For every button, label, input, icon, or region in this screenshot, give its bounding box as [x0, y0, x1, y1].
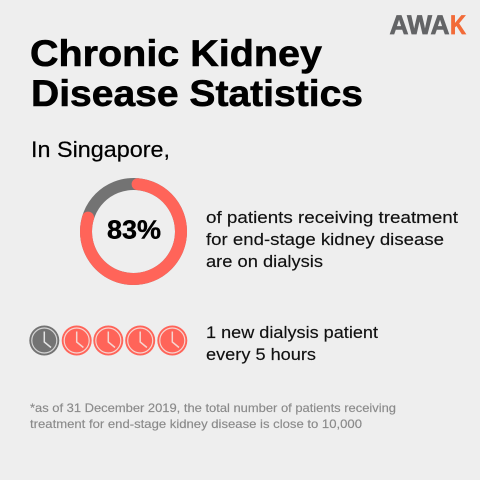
- donut value: 83%: [107, 216, 161, 244]
- icon: grey clock: [29, 326, 59, 356]
- text: dialysis share: for end-stage kidney disease: [206, 231, 444, 249]
- subheading: In Singapore: In Singapore,: [31, 137, 170, 162]
- text: dialysis share: of patients receiving treatment: [206, 209, 458, 227]
- donut chart: 83%: [86, 184, 181, 279]
- icon: red clock 1: [62, 326, 92, 356]
- footnote: [30, 401, 396, 431]
- icon: red clock 2: [93, 326, 123, 356]
- title: Disease Statistics: [31, 73, 363, 114]
- logo: AWAK: K: [450, 10, 466, 40]
- text: new patient rate: every 5 hours: [206, 346, 316, 364]
- clock icons row: [29, 326, 187, 356]
- text: new patient rate: [206, 324, 378, 364]
- icon: red clock 3: [125, 326, 155, 356]
- icon: red clock 4: [157, 326, 187, 356]
- title: Chronic Kidney: [30, 33, 322, 74]
- logo: AWAK: AWA: [390, 10, 450, 40]
- text: dialysis share: [206, 209, 458, 271]
- footnote: treatment for end-stage kidney disease is close to 10,000: [30, 417, 362, 431]
- text: new patient rate: 1 new dialysis patient: [206, 324, 378, 342]
- footnote: *as of 31 December 2019, the total number of patients receiving: [30, 401, 396, 415]
- text: dialysis share: are on dialysis: [206, 253, 323, 271]
- title: [30, 33, 363, 114]
